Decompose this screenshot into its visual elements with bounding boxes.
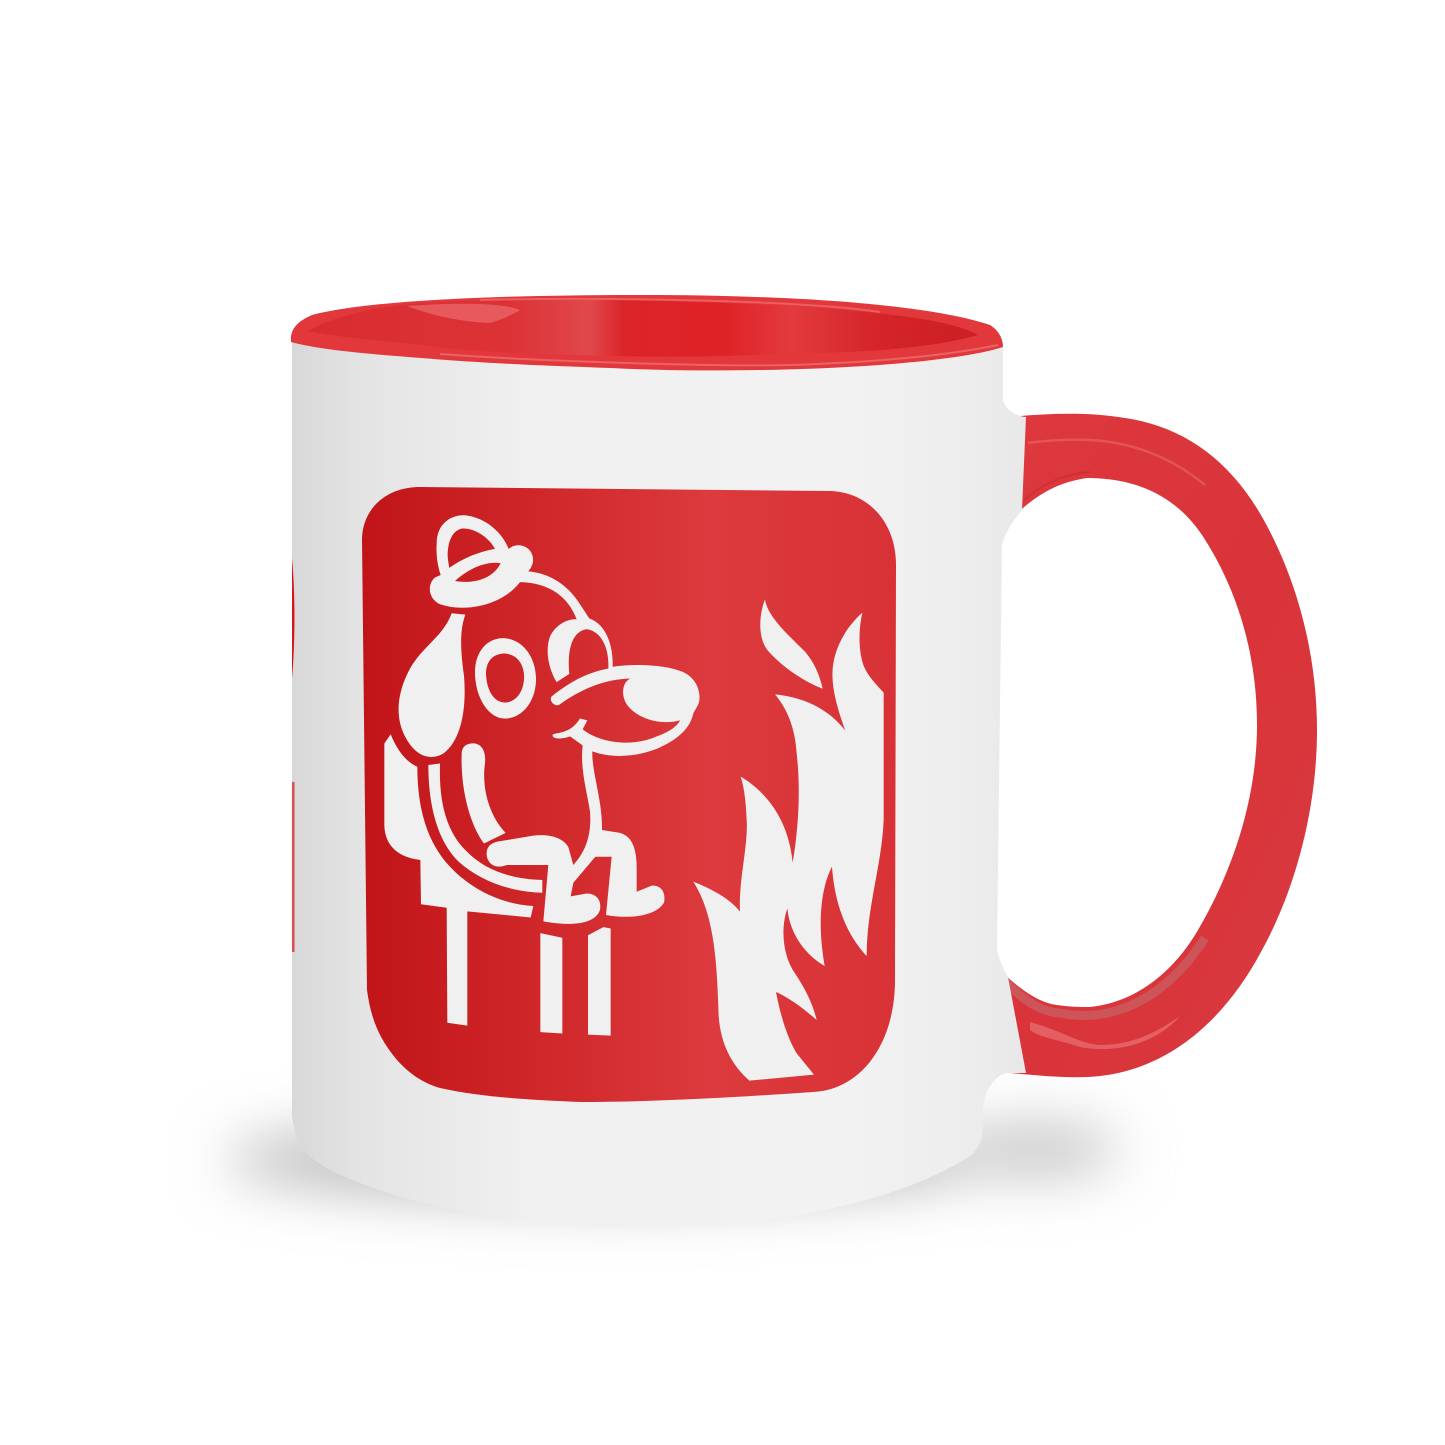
icon: chair legs xyxy=(540,933,562,1034)
red marks wrapping around the left edge xyxy=(292,558,294,952)
icon: main flame xyxy=(693,613,884,1081)
icon: dog outline with hat, snout and legs xyxy=(430,515,700,924)
icon: arm xyxy=(462,743,506,844)
icon: flames xyxy=(693,599,884,1081)
icon: flame tip left xyxy=(760,599,823,689)
mug body xyxy=(292,340,1026,1228)
icon: dog in chair xyxy=(384,515,700,1036)
printed red rounded panel xyxy=(362,487,896,1102)
icon: chair back, seat and rear leg xyxy=(384,734,533,1026)
icon: chair leg right xyxy=(588,927,611,1036)
mug handle xyxy=(1000,414,1317,1077)
icon: eye xyxy=(475,638,536,719)
icon: ear xyxy=(399,613,465,757)
product photo: red mug xyxy=(216,295,1317,1234)
mug rim and red interior xyxy=(291,295,1003,370)
icon: chair arm strip xyxy=(428,764,542,893)
ground shadow xyxy=(225,1118,1120,1202)
